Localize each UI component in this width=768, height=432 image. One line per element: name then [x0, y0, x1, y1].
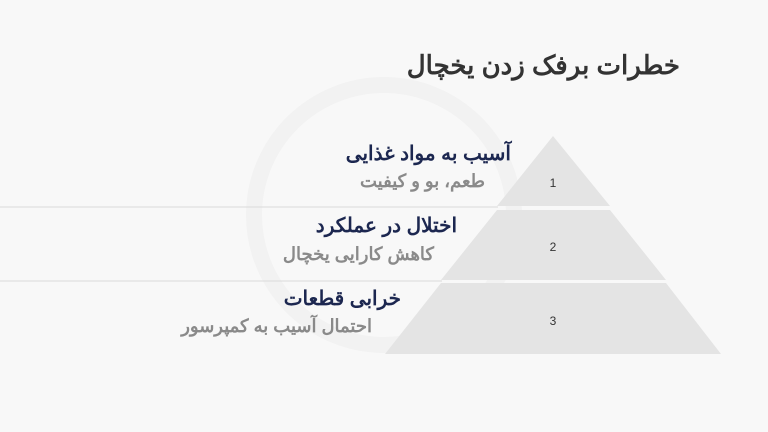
tier 2: [441, 210, 666, 280]
tier 3: [385, 283, 721, 354]
item 2 sub: کاهش کارایی یخچال: [283, 244, 434, 264]
item 3 sub: احتمال آسیب به کمپرسور: [181, 316, 372, 336]
item 1 sub: طعم، بو و کیفیت: [360, 171, 485, 191]
tier 3: 3: [550, 314, 557, 328]
separator lines: [0, 206, 498, 208]
title: خطرات برفک زدن یخچال: [407, 50, 680, 80]
tier 1: 1: [550, 176, 557, 190]
item 2 heading: اختلال در عملکرد: [316, 215, 457, 237]
tier 1: [497, 136, 610, 206]
tier 2: 2: [550, 240, 557, 254]
item 1 heading: آسیب به مواد غذایی: [346, 143, 511, 165]
item 3 heading: خرابی قطعات: [284, 288, 401, 310]
